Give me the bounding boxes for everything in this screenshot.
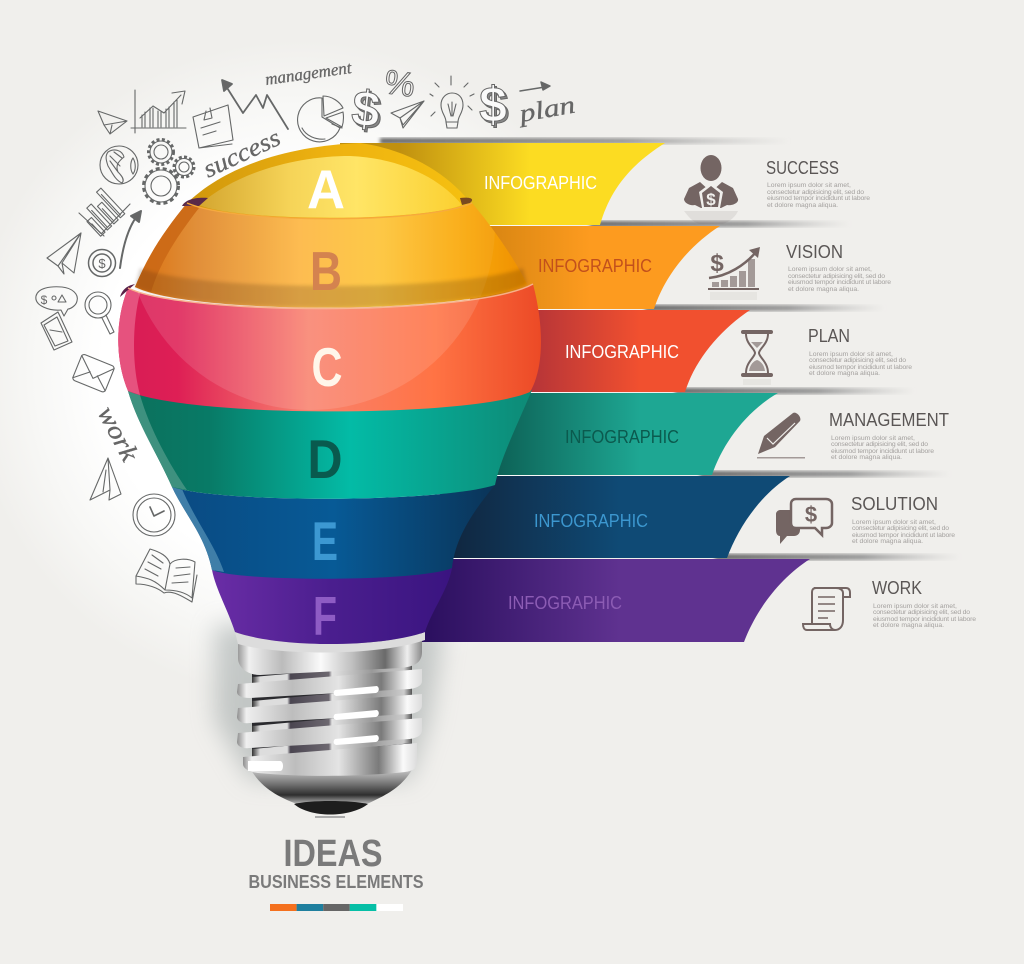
body: eiusmod tempor incididunt ut labore	[788, 279, 891, 286]
base shadow	[215, 625, 445, 780]
icon: speech bubbles	[776, 499, 832, 544]
body: eiusmod tempor incididunt ut labore	[809, 364, 912, 371]
body: et dolore magna aliqua.	[809, 370, 880, 377]
body	[809, 351, 912, 377]
body: et dolore magna aliqua.	[873, 622, 944, 629]
letter A: A	[307, 158, 345, 220]
letter D: D	[308, 428, 342, 490]
ribbon labels	[484, 173, 679, 613]
icon: light bulb	[430, 76, 474, 128]
heading: PLAN	[808, 326, 850, 346]
icon: businessman: $	[706, 190, 716, 209]
icon: dollar 2: $	[479, 77, 507, 133]
heading: VISION	[786, 242, 843, 262]
coin dollar: $	[98, 256, 106, 271]
icon: smartphone	[41, 312, 72, 350]
icon: speech bubbles: $	[805, 502, 817, 527]
band F purple	[212, 568, 452, 644]
handwriting: plan: plan	[515, 92, 577, 128]
icon: percent: %	[382, 63, 417, 105]
subtitle: BUSINESS ELEMENTS	[248, 872, 424, 892]
icon: paper plane top left	[98, 111, 127, 134]
icon: scroll	[803, 588, 850, 630]
body: consectetur adipisicing elit, sed do	[788, 273, 885, 280]
body: eiusmod tempor incididunt ut labore	[873, 616, 976, 623]
item: solution	[776, 494, 955, 545]
body: et dolore magna aliqua.	[831, 454, 902, 461]
icon: rising chart: $	[710, 250, 724, 277]
heading: MANAGEMENT	[829, 410, 949, 430]
icon: growth bar chart	[131, 90, 186, 133]
band B bottom shade	[135, 268, 527, 308]
bubble dollar: $	[41, 293, 48, 307]
body	[873, 603, 976, 629]
ribbon labels: INFOGRAPHIC	[534, 511, 648, 531]
icon: pen	[757, 413, 805, 458]
icon: pie chart	[298, 96, 343, 142]
icon: dollar 1 shadow: $	[351, 82, 385, 141]
icon: paper plane left	[47, 233, 81, 274]
icon: envelope	[72, 354, 115, 393]
title: IDEAS	[284, 833, 382, 875]
body	[788, 266, 891, 293]
ribbon F purple	[420, 559, 810, 642]
icon: curved arrow	[120, 211, 141, 268]
ribbon A yellow	[340, 143, 665, 225]
handwriting: success: success	[199, 124, 285, 183]
body: et dolore magna aliqua.	[852, 538, 923, 545]
ribbon labels: INFOGRAPHIC	[565, 427, 679, 447]
heading: SUCCESS	[766, 158, 839, 178]
letter C: C	[312, 336, 342, 398]
icon: dollar 2 shadow: $	[481, 79, 509, 135]
body: et dolore magna aliqua.	[788, 286, 859, 293]
band B orange	[135, 203, 527, 308]
color legend bar	[270, 904, 403, 911]
screw base	[235, 632, 425, 818]
ribbon C red	[500, 310, 750, 392]
body	[767, 182, 870, 209]
item: plan	[741, 326, 912, 385]
band C red	[118, 284, 541, 411]
body: et dolore magna aliqua.	[767, 202, 838, 209]
icon: gears	[144, 140, 194, 204]
icon: hourglass	[741, 330, 773, 385]
ribbon labels: INFOGRAPHIC	[565, 342, 679, 362]
ribbon labels: INFOGRAPHIC	[484, 173, 597, 193]
body: consectetur adipisicing elit, sed do	[831, 441, 928, 448]
icon: sticky notes	[193, 105, 233, 148]
lightbulb	[118, 143, 541, 818]
icon: globe	[100, 146, 138, 184]
icon: dollar 1 face: $	[349, 80, 383, 138]
icon: businessman	[684, 155, 738, 224]
item: vision	[708, 242, 891, 300]
body: Lorem ipsum dolor sit amet,	[852, 519, 936, 526]
item: success	[684, 155, 870, 224]
band B highlight	[136, 204, 494, 308]
body: eiusmod tempor incididunt ut labore	[831, 448, 934, 455]
doodle icons	[36, 58, 577, 602]
icon: arrow to plan	[520, 82, 550, 91]
ribbon labels: INFOGRAPHIC	[538, 256, 652, 276]
letter F: F	[313, 585, 337, 647]
heading: SOLUTION	[851, 494, 938, 514]
letter E: E	[312, 510, 338, 572]
background glow	[0, 40, 630, 700]
ribbon shadows	[380, 138, 960, 560]
body: Lorem ipsum dolor sit amet,	[831, 435, 915, 442]
icon: coin	[88, 250, 116, 276]
handwriting: work: work	[92, 401, 145, 466]
icon: zigzag arrow	[222, 80, 288, 129]
ribbon D teal	[490, 393, 778, 475]
band E navy	[172, 485, 495, 579]
ribbon E navy	[440, 476, 790, 558]
band A lens	[199, 156, 462, 218]
glass highlight	[138, 292, 480, 410]
body: Lorem ipsum dolor sit amet,	[767, 182, 851, 189]
icon: open book	[136, 549, 197, 602]
band D teal	[128, 390, 532, 499]
handwriting: management: management	[264, 58, 354, 89]
icon: paper plane lower	[90, 458, 121, 500]
band A gold top	[185, 143, 472, 220]
item: work	[803, 578, 976, 630]
body: Lorem ipsum dolor sit amet,	[873, 603, 957, 610]
body: eiusmod tempor incididunt ut labore	[852, 532, 955, 539]
body: consectetur adipisicing elit, sed do	[767, 189, 864, 196]
icon: clock	[133, 494, 175, 536]
body: Lorem ipsum dolor sit amet,	[809, 351, 893, 358]
ribbon B orange	[470, 226, 720, 309]
ribbon labels: INFOGRAPHIC	[508, 593, 622, 613]
icon: speech bubble	[36, 287, 77, 316]
body: consectetur adipisicing elit, sed do	[852, 525, 949, 532]
letter B: B	[310, 240, 342, 302]
body: consectetur adipisicing elit, sed do	[873, 609, 970, 616]
body	[852, 519, 955, 545]
body: eiusmod tempor incididunt ut labore	[767, 195, 870, 202]
heading: WORK	[872, 578, 922, 598]
body	[831, 435, 934, 461]
icon: magnifier	[85, 292, 114, 334]
item: management	[757, 410, 949, 461]
body: consectetur adipisicing elit, sed do	[809, 357, 906, 364]
body: Lorem ipsum dolor sit amet,	[788, 266, 872, 273]
icon: diagonal bars	[77, 188, 130, 236]
icon: rising chart	[708, 247, 760, 300]
icon: paper plane top	[391, 101, 424, 128]
